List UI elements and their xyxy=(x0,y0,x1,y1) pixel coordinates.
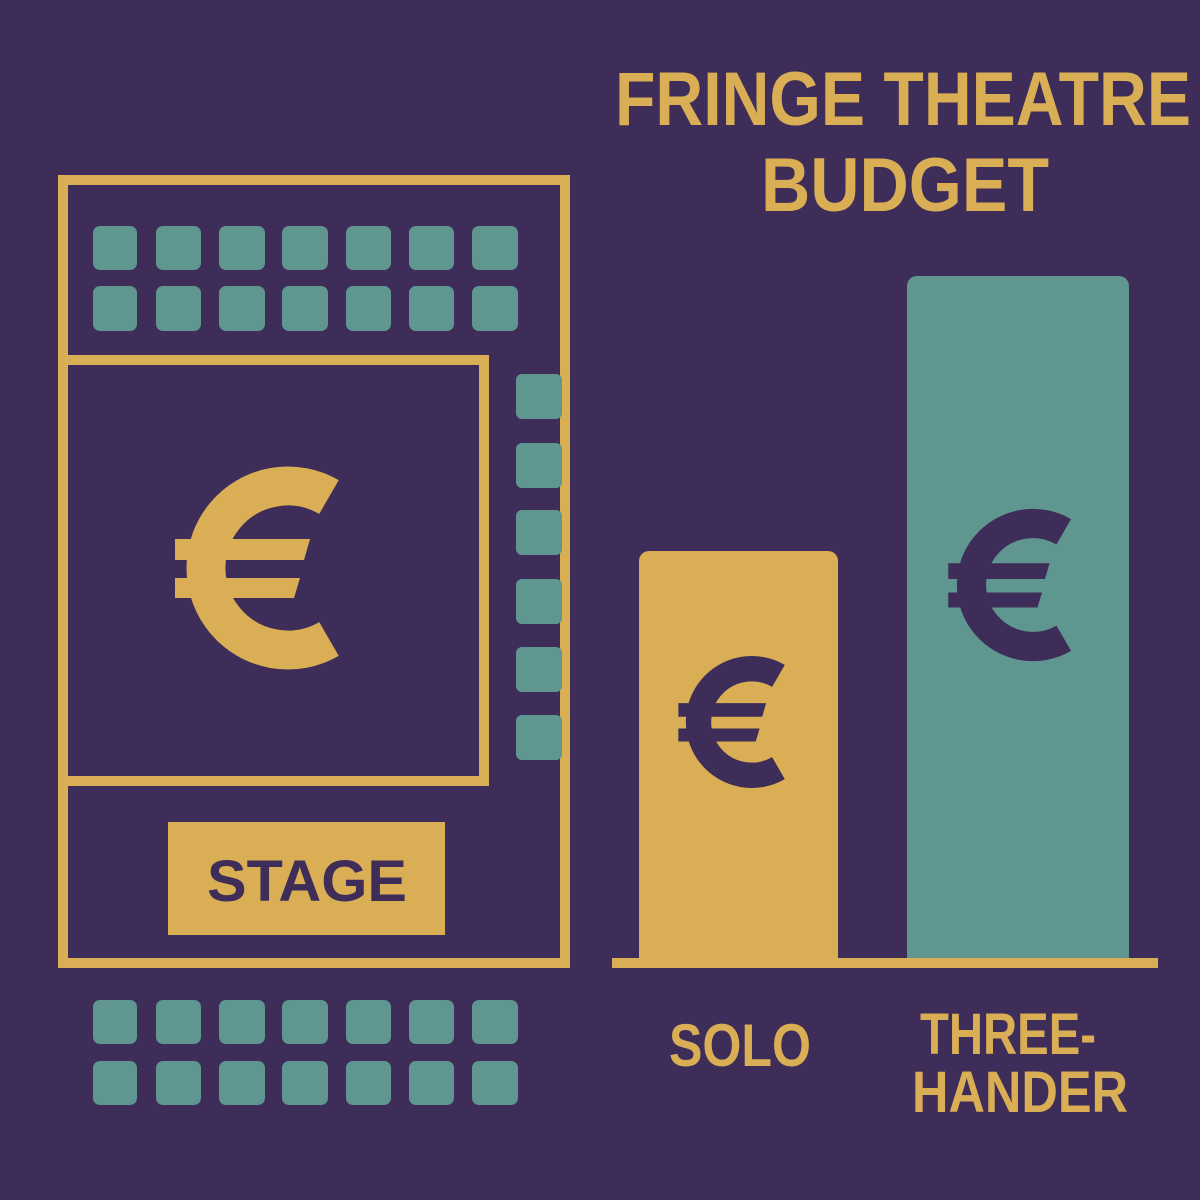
stage label xyxy=(168,822,445,935)
stage box xyxy=(63,360,484,781)
seats: side column xyxy=(516,374,562,760)
title: BUDGET xyxy=(761,143,1049,228)
seats: top block xyxy=(93,226,518,331)
outer frame xyxy=(63,180,565,963)
bar: solo xyxy=(639,551,838,962)
baseline xyxy=(612,958,1158,968)
icon: euro large xyxy=(175,486,329,650)
panel: theatre floor plan xyxy=(63,180,565,963)
label: three-hander: HANDER xyxy=(912,1060,1128,1125)
bar: three-hander xyxy=(907,276,1129,962)
title xyxy=(615,57,1191,228)
seats: bottom block xyxy=(93,1000,518,1105)
label: three-hander: THREE- xyxy=(920,1002,1096,1067)
label: three-hander xyxy=(912,1002,1128,1125)
bar chart xyxy=(612,276,1158,1125)
label: solo: SOLO xyxy=(669,1012,811,1079)
stage label: STAGE xyxy=(207,849,407,914)
